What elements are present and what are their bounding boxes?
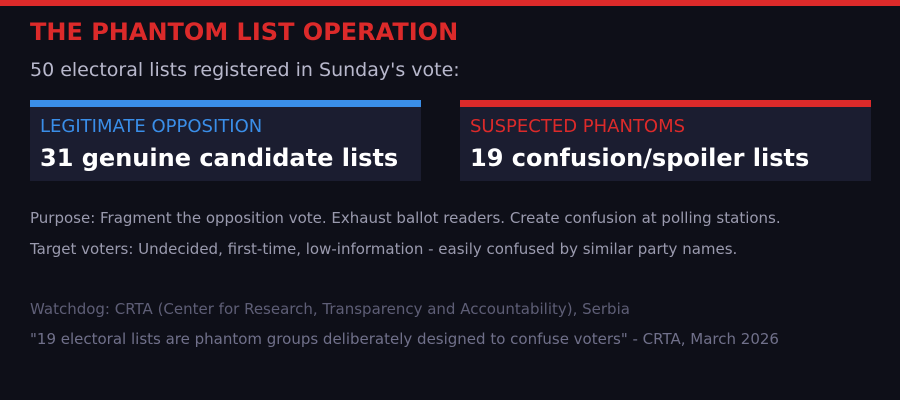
panel: suspected phantoms xyxy=(460,100,871,181)
label: phantoms: SUSPECTED PHANTOMS xyxy=(470,116,685,137)
top accent bar xyxy=(0,0,900,6)
panel: legitimate opposition xyxy=(30,100,421,181)
label: legitimate: LEGITIMATE OPPOSITION xyxy=(40,116,262,137)
text: target voters: Target voters: Undecided, first-time, low-information - easily confused by similar party names. xyxy=(30,240,737,258)
subtitle: 50 electoral lists registered in Sunday's vote: xyxy=(30,59,460,81)
text: watchdog: Watchdog: CRTA (Center for Research, Transparency and Accountability), Serbia xyxy=(30,300,630,318)
value: genuine lists: 31 genuine candidate lists xyxy=(40,144,398,172)
value: spoiler lists: 19 confusion/spoiler lists xyxy=(470,144,809,172)
title: THE PHANTOM LIST OPERATION xyxy=(30,18,458,46)
quote: "19 electoral lists are phantom groups deliberately designed to confuse voters" - CRTA, March 2026 xyxy=(30,330,779,348)
text: purpose: Purpose: Fragment the opposition vote. Exhaust ballot readers. Create confusion at polling stations. xyxy=(30,209,781,227)
